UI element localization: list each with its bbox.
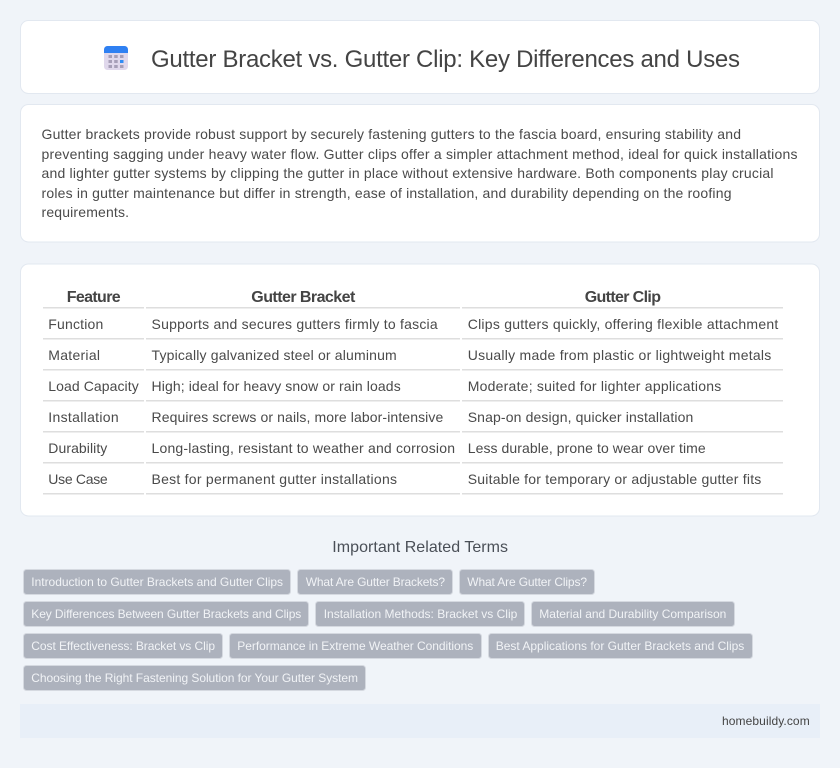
table header row: Gutter Clip bbox=[585, 289, 661, 306]
row: use case bbox=[48, 471, 761, 487]
text block: introduction paragraph: roles in gutter maintenance but differ in strength, ease of installation, and durability depending on the roofing bbox=[42, 185, 732, 201]
chip: what are clips: What Are Gutter Clips? bbox=[467, 575, 587, 589]
chip: key differences bbox=[24, 602, 308, 626]
panel: comparison table bbox=[20, 264, 820, 516]
chip: introduction: Introduction to Gutter Brackets and Gutter Clips bbox=[31, 575, 283, 589]
icon: calendar bbox=[104, 46, 128, 70]
row: use case: Best for permanent gutter installations bbox=[152, 471, 397, 487]
row: installation: Requires screws or nails, more labor-intensive bbox=[152, 409, 444, 425]
chip: cost effectiveness: Cost Effectiveness: Bracket vs Clip bbox=[31, 639, 215, 653]
text block: introduction paragraph: and lighter gutter systems by clipping the gutter in place without extensive hardware. Both components play crucial bbox=[42, 165, 774, 181]
row: function: Supports and secures gutters firmly to fascia bbox=[152, 316, 438, 332]
chip: choosing fastening bbox=[24, 666, 366, 690]
row: material: Typically galvanized steel or aluminum bbox=[152, 347, 397, 363]
chip: what are brackets bbox=[298, 570, 452, 594]
chip: what are clips bbox=[460, 570, 594, 594]
row: function: Function bbox=[48, 316, 103, 332]
row: installation: Snap-on design, quicker installation bbox=[468, 409, 693, 425]
chip: extreme weather: Performance in Extreme Weather Conditions bbox=[237, 639, 473, 653]
chip: what are brackets: What Are Gutter Brackets? bbox=[306, 575, 445, 589]
row: load capacity: High; ideal for heavy snow or rain loads bbox=[152, 378, 401, 394]
row: function: Clips gutters quickly, offering flexible attachment bbox=[468, 316, 778, 332]
table header row: Gutter Bracket bbox=[251, 289, 356, 306]
table header row bbox=[67, 289, 661, 306]
text block: introduction paragraph: requirements. bbox=[42, 204, 129, 220]
row: material: Usually made from plastic or lightweight metals bbox=[468, 347, 771, 363]
row: load capacity: Moderate; suited for lighter applications bbox=[468, 378, 721, 394]
title: Gutter Bracket vs. Gutter Clip: Key Differences and Uses bbox=[151, 46, 740, 73]
panel: introduction bbox=[20, 104, 820, 242]
text block: introduction paragraph: Gutter brackets provide robust support by securely fastening gutters to the fascia board, ensuring stability and bbox=[42, 126, 741, 142]
row: load capacity: Load Capacity bbox=[48, 378, 139, 394]
chip: installation methods bbox=[316, 602, 524, 626]
chip: choosing fastening: Choosing the Right Fastening Solution for Your Gutter System bbox=[31, 671, 358, 685]
heading: important related terms: Important Related Terms bbox=[332, 539, 508, 556]
chip: extreme weather bbox=[230, 634, 482, 658]
row: function bbox=[48, 316, 778, 332]
chip: introduction bbox=[24, 570, 290, 594]
row: durability: Less durable, prone to wear over time bbox=[468, 440, 706, 456]
row: material: Material bbox=[48, 347, 100, 363]
text block: introduction paragraph bbox=[42, 126, 798, 220]
row: durability bbox=[48, 440, 706, 456]
panel: header bbox=[20, 20, 820, 94]
chip: best applications bbox=[488, 634, 752, 658]
row: durability: Durability bbox=[48, 440, 107, 456]
chip: best applications: Best Applications for Gutter Brackets and Clips bbox=[496, 639, 744, 653]
chip: installation methods: Installation Methods: Bracket vs Clip bbox=[324, 607, 518, 621]
row: use case: Use Case bbox=[48, 471, 108, 487]
footer: homebuildy.com bbox=[722, 714, 810, 728]
row: durability: Long-lasting, resistant to weather and corrosion bbox=[152, 440, 455, 456]
chip: material and durability: Material and Durability Comparison bbox=[539, 607, 726, 621]
footer bbox=[20, 704, 820, 738]
text block: introduction paragraph: preventing sagging under heavy water flow. Gutter clips offer a simpler attachment method, ideal for quick installations bbox=[42, 146, 798, 162]
table header row: Feature bbox=[67, 289, 121, 306]
row: use case: Suitable for temporary or adjustable gutter fits bbox=[468, 471, 761, 487]
row: installation: Installation bbox=[48, 409, 119, 425]
chip: key differences: Key Differences Between Gutter Brackets and Clips bbox=[31, 607, 301, 621]
chip: cost effectiveness bbox=[24, 634, 222, 658]
chip: material and durability bbox=[532, 602, 734, 626]
row: installation bbox=[48, 409, 693, 425]
row: load capacity bbox=[48, 378, 721, 394]
panel: related term chips bbox=[24, 570, 752, 690]
row: material bbox=[48, 347, 771, 363]
